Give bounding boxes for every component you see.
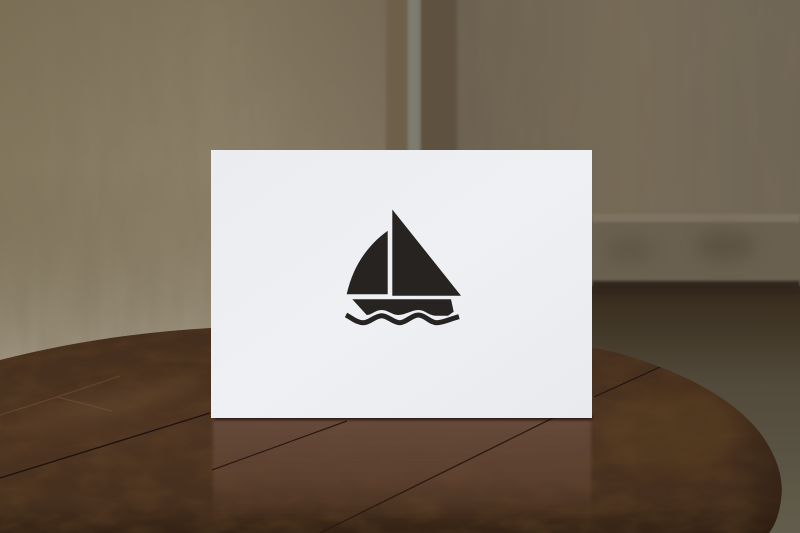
round wooden table [0, 325, 790, 533]
right sail [392, 210, 461, 296]
left sail [347, 231, 388, 294]
background wall [0, 0, 800, 370]
hull [352, 299, 454, 316]
white card [211, 150, 592, 418]
icon: sailboat [346, 210, 461, 323]
wave [346, 315, 459, 323]
wooden post [386, 0, 457, 155]
wooden rail on right [592, 214, 800, 533]
card shadow [214, 415, 592, 420]
